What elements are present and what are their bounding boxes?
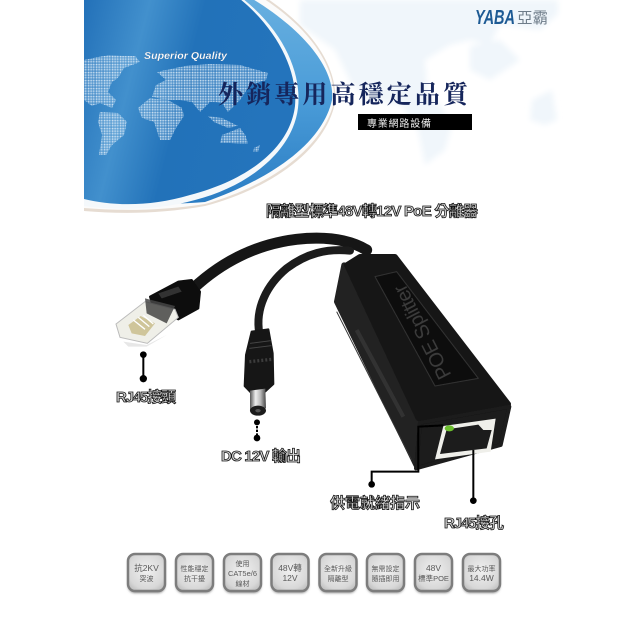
button 4 [272,554,308,593]
DC plug [245,329,273,416]
black tag [358,114,472,130]
button 3: 線材 [236,579,250,588]
embossed label: POE Splitter [389,280,456,383]
button 3: 使用 [236,559,250,568]
button 5 [320,554,356,593]
button 4: 12V [282,573,298,583]
label: DC output: DC 12V 輸出 [221,447,301,465]
button 8 [463,554,500,593]
button 1: 突波 [140,574,154,583]
label: RJ45 jack: RJ45接孔 [444,514,504,532]
button 8: 14.4W [469,573,494,583]
button 2: 抗干擾 [184,574,205,583]
button 5: 隔離型 [328,574,348,583]
superior quality: Superior Quality [144,50,228,62]
button 2: 性能穩定 [180,564,208,573]
top [347,257,508,419]
cables [193,238,367,333]
button 6 [367,554,404,593]
light blue crescent [180,0,332,204]
button 5: 全新升級 [324,564,352,573]
background world map [300,0,558,165]
label: power indicator: 供電就緒指示 [330,494,420,512]
title: 外銷專用高穩定品質 [218,80,471,109]
white band [84,0,299,209]
button 4: 48V轉 [278,563,302,573]
button 7 [415,554,452,593]
button 1: 抗2KV [134,563,159,573]
outer halo [84,0,335,213]
blue globe graphic [84,0,335,213]
button 3 [224,554,261,593]
recessed panel [375,272,478,386]
splitter body [337,257,509,468]
button 6: 無需設定 [372,564,400,573]
button 7: 48V [426,563,441,573]
button 6: 隨插即用 [372,574,400,583]
callout dots [140,351,477,504]
callout lines [143,354,473,501]
left side [337,265,418,465]
power LED [445,425,454,431]
button 7: 標準POE [418,573,449,583]
product: PoE splitter [116,238,509,504]
dark blue disc [84,0,295,204]
logo: YABA [475,7,515,29]
black tag: 專業網路設備 [367,117,431,130]
button 1 [128,554,165,593]
button 3: CAT5e/6 [228,569,257,578]
feature buttons [128,554,500,593]
logo: 亞霸 [517,10,548,27]
button 2 [176,554,213,593]
RJ45 port [435,419,496,459]
subtitle: 隔離型標準48V轉12V PoE 分離器 [266,202,478,220]
label: RJ45 plug: RJ45接頭 [116,388,176,406]
front face [416,407,509,468]
button 8: 最大功率 [468,564,496,573]
RJ45 plug [116,280,200,347]
dotted world map [84,55,268,155]
